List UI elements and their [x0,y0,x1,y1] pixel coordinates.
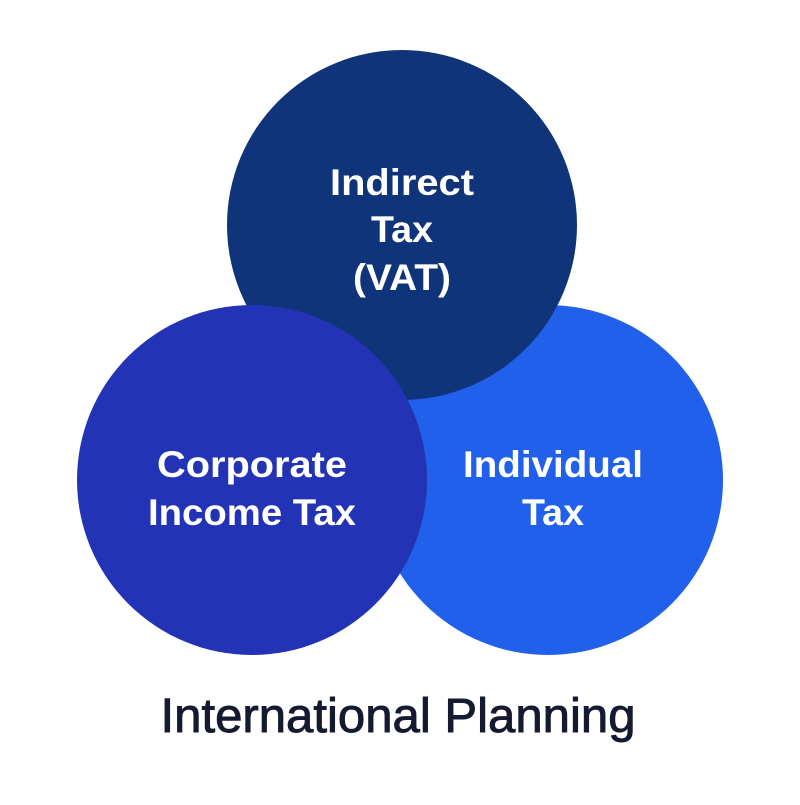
title: International Planning: International Planning [160,690,636,743]
circle: Corporate Income Tax: Corporate [157,444,347,485]
circle: Corporate Income Tax: Income Tax [148,492,356,533]
circle: Corporate Income Tax [77,305,427,655]
circle: Indirect Tax (VAT): (VAT) [353,257,451,298]
circle: Individual Tax [373,305,723,655]
circle: Indirect Tax (VAT): Indirect [330,162,474,203]
circle: Individual Tax: Tax [522,492,584,533]
circle: Individual Tax: Individual [463,444,643,485]
circle: Indirect Tax (VAT): Tax [371,209,433,250]
circle: Indirect Tax (VAT) [227,50,577,400]
